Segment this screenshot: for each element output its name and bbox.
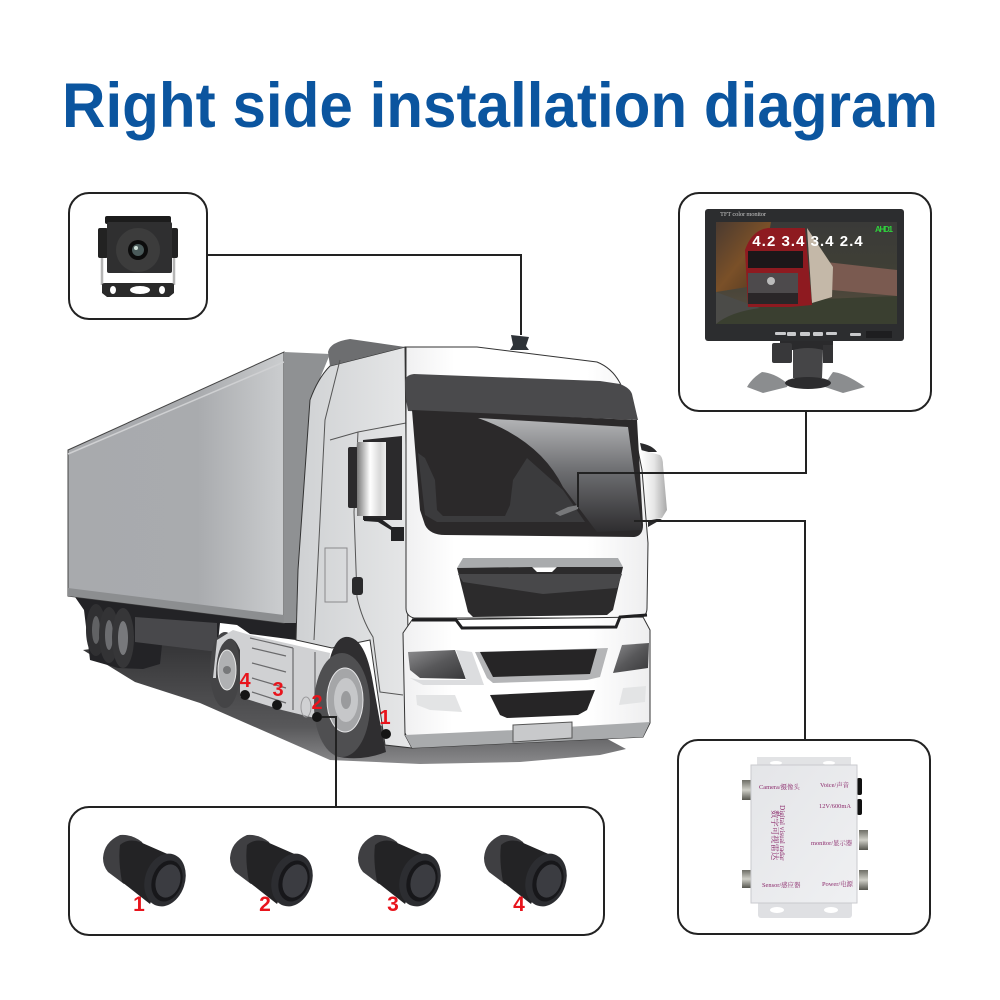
- sensor point markers: 4: [239, 670, 251, 692]
- interior seats: [418, 453, 585, 522]
- sensor point markers: 3: [272, 679, 284, 701]
- icon: camera: [98, 216, 178, 297]
- right mirror: [640, 443, 667, 527]
- number plate: [513, 722, 572, 742]
- trailer box: [68, 352, 330, 623]
- truck illustration: [68, 335, 667, 764]
- control box labels: Sensor/感应器: [762, 880, 801, 889]
- monitor bezel: [705, 209, 904, 341]
- control box labels: monitor/显示器: [811, 838, 853, 847]
- monitor screen: AHD1: [875, 225, 894, 234]
- front wheel: [314, 637, 386, 758]
- control box labels: Voice/声音: [820, 780, 850, 789]
- control box labels: 12V/600mA: [819, 803, 851, 810]
- trailer chassis and wheels: [75, 597, 296, 669]
- control box labels: [759, 780, 853, 889]
- control box labels: Digital visual radar: [778, 805, 786, 861]
- cab front: [405, 347, 648, 618]
- control box hardware: [742, 757, 868, 918]
- windshield glare: [478, 418, 642, 532]
- title: Right side installation diagram: [62, 71, 938, 141]
- side window and left mirror: [348, 436, 404, 541]
- sensor 3: [358, 835, 447, 916]
- windshield: [412, 410, 643, 537]
- sun visor: [405, 374, 638, 420]
- upper grille: [457, 558, 623, 568]
- monitor stand: [747, 341, 865, 393]
- sensor 2: [230, 835, 319, 916]
- fog lamp recesses: [416, 695, 462, 712]
- control box labels: Camera/摄像头: [759, 782, 800, 791]
- panel: parking sensors: [69, 807, 604, 935]
- small roof camera: [510, 335, 529, 350]
- monitor screen: 4.2 3.4 3.4 2.4: [752, 234, 863, 251]
- on-screen truck: [745, 228, 833, 307]
- sensor 1: [103, 835, 192, 916]
- monitor screen: [716, 222, 897, 324]
- headlights: [408, 650, 466, 679]
- tractor cab side: [296, 339, 412, 748]
- sensor point markers: 2: [311, 692, 323, 714]
- panel: rear camera: [69, 193, 207, 319]
- sensor 4: [484, 835, 573, 916]
- connector lines: [207, 255, 806, 807]
- sensor point markers: 1: [379, 707, 391, 729]
- bumper assembly: [403, 558, 650, 748]
- sensor 1: 1: [133, 893, 145, 916]
- sensor point markers: [239, 670, 391, 739]
- ground shadow: [83, 640, 626, 764]
- sensor 2: 2: [259, 893, 271, 916]
- lower grille: [475, 648, 608, 683]
- panel: monitor: [679, 193, 931, 411]
- steering wheel: [555, 505, 578, 516]
- sensor 4: 4: [513, 893, 525, 916]
- side skirt and rear drive wheel: [210, 630, 330, 720]
- control box labels: 数字可视雷达: [770, 810, 780, 861]
- sensor 3: 3: [387, 893, 399, 916]
- monitor buttons: [775, 331, 892, 338]
- panel: radar control box: [678, 740, 930, 934]
- control box labels: Power/电源: [822, 879, 853, 888]
- model text: TFT color monitor: [720, 211, 767, 218]
